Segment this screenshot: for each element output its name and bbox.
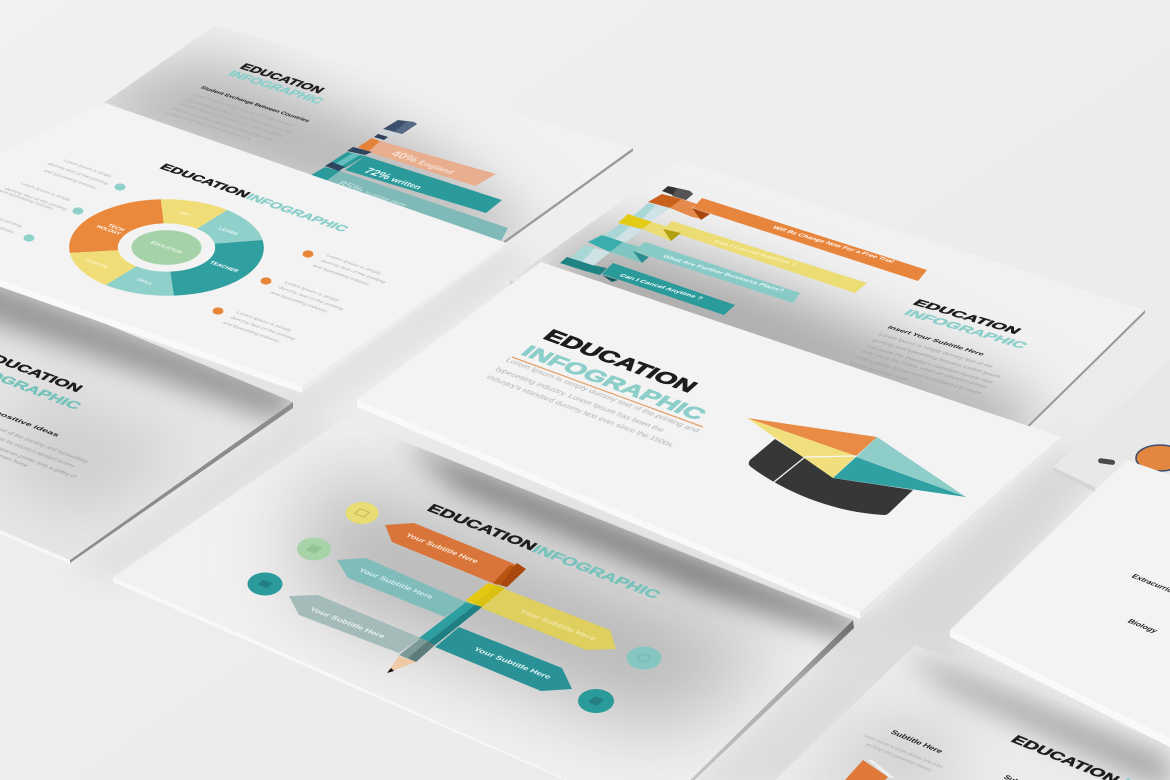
heading: donut slide: EDUCATION xyxy=(157,162,253,199)
body text: when an unknown printer took a galley of type and xyxy=(169,107,274,142)
heading: FAQ slide xyxy=(901,297,1031,350)
legend text: and typesetting industry. xyxy=(220,321,282,344)
arrow: orange: Your Subtitle Here xyxy=(404,531,481,565)
body text: Lorem Ipsum is simply dummy text of the printing xyxy=(190,93,295,128)
icon: orange circle xyxy=(1136,445,1170,471)
legend text: Lorem Ipsum is simply xyxy=(324,254,384,276)
heading: bottom right slide xyxy=(1007,734,1133,780)
legend text: Lorem Ipsum is simply xyxy=(282,281,342,303)
pencil ribbons: Will Be Change Now For a Free Trial xyxy=(770,225,896,264)
body text: and typesetting industry. Lorem Ipsum has been the xyxy=(183,98,293,135)
arrow: gray: Your Subtitle Here xyxy=(308,605,388,640)
heading: bar chart slide: INFOGRAPHIC xyxy=(225,69,327,106)
slide: small right back xyxy=(1053,360,1170,520)
body text: took a galley of type and scrambled it to make xyxy=(853,356,983,396)
heading: main slide xyxy=(516,327,711,424)
arrow: gray xyxy=(289,595,421,653)
heading: donut slide xyxy=(157,162,352,234)
donut labels: LEARN xyxy=(216,227,239,236)
body text: typesetting industry. Lorem Ipsum has been the xyxy=(494,365,667,434)
pencil ribbons: Can I Cancel Anytime ? xyxy=(617,273,705,301)
legend text: dummy text of the printing xyxy=(318,259,388,285)
legend text: and typesetting industry. xyxy=(310,264,372,287)
body text: Lorem Ipsum is simply dummy text of the xyxy=(862,734,945,769)
donut labels: SCHOOL xyxy=(83,259,111,270)
donut labels: HOLOGY xyxy=(94,225,122,236)
slide: donut chart xyxy=(0,103,507,393)
legend text: Lorem Ipsum is simply xyxy=(234,311,294,333)
heading: pencil slide: EDUCATION xyxy=(423,502,540,553)
heading: main slide: INFOGRAPHIC xyxy=(516,343,711,424)
legend text: dummy text of the printing xyxy=(45,162,110,186)
donut labels: EDUCATION xyxy=(148,241,184,255)
body text: has been the industry's standard dummy text xyxy=(864,345,994,385)
legend text xyxy=(0,159,388,344)
ground shadows xyxy=(0,250,1170,780)
heading: FAQ slide: INFOGRAPHIC xyxy=(901,307,1031,350)
arrow: yellow: Your Subtitle Here xyxy=(518,607,599,642)
body text: ever since the 1500s, when an unknown printer xyxy=(859,350,989,390)
body text: scrambled it to make a type specimen book xyxy=(162,111,253,142)
heading: FAQ slide: EDUCATION xyxy=(910,297,1025,336)
icon: dark pill xyxy=(1098,458,1115,465)
donut labels: TEACHER xyxy=(207,261,240,274)
body text: Lorem Ipsum is simply dummy text of the printing and xyxy=(504,356,702,434)
donut labels: ART xyxy=(176,211,192,218)
arrow: yellow xyxy=(466,588,616,650)
arrow: dark teal xyxy=(435,627,572,691)
arrow: orange xyxy=(385,523,517,585)
pencil ribbons: What Are Further Business Plans? xyxy=(660,254,786,293)
slide: main cap xyxy=(357,262,1061,619)
slide: bar chart xyxy=(102,32,633,242)
body text: a type specimen book. xyxy=(847,362,912,383)
arrow: light teal: Your Subtitle Here xyxy=(357,566,436,600)
pencil ribbons: Can I Cancel Anytime ? xyxy=(711,239,799,267)
heading: main slide: EDUCATION xyxy=(538,327,701,396)
legend text: dummy text of the printing xyxy=(228,316,298,342)
slide: right partial xyxy=(950,460,1170,747)
slide: bottom right xyxy=(775,645,1170,780)
legend text: Lorem Ipsum is simply xyxy=(18,182,73,202)
body text xyxy=(162,93,295,142)
legend text: and typesetting industry. xyxy=(41,169,99,190)
legend dots xyxy=(24,183,314,315)
body text: industry's standard dummy text ever since the 1500s, xyxy=(176,102,286,138)
donut labels: SKILL xyxy=(134,278,155,287)
legend text: Lorem Ipsum is simply xyxy=(61,159,114,179)
slide: left partial xyxy=(0,270,300,564)
icon circles xyxy=(248,502,662,713)
body text: industry's standard dummy text ever since the 1500s. xyxy=(485,373,678,449)
icon: graduation cap xyxy=(747,418,966,515)
heading: left slide xyxy=(0,355,84,409)
legend text: dummy text of the printing xyxy=(2,187,69,212)
bar chart with pencil: 72% written xyxy=(361,166,426,191)
heading: pencil slide: INFOGRAPHIC xyxy=(528,543,664,602)
heading: pencil slide xyxy=(423,502,664,602)
bar chart with pencil: 85% Subtitle Here xyxy=(334,179,413,208)
donut labels: TECH xyxy=(105,224,126,232)
donut labels xyxy=(83,211,240,287)
label: biology: Biology xyxy=(1126,618,1161,635)
subtitle: Insert Your Subtitle Here xyxy=(885,325,986,357)
pencil ribbons xyxy=(560,186,927,315)
body text: Lorem Ipsum is simply dummy text of the xyxy=(876,333,994,369)
heading: bottom right slide: EDUCATION xyxy=(1007,734,1122,780)
body text xyxy=(847,333,1002,396)
heading: bar chart slide: EDUCATION xyxy=(237,62,327,95)
legend text: and typesetting industry. xyxy=(268,291,330,314)
heading: donut slide: INFOGRAPHIC xyxy=(243,192,352,234)
arrow: dark teal: Your Subtitle Here xyxy=(472,645,554,680)
subtitle: Subtitle Here xyxy=(889,729,946,755)
arrow: light teal xyxy=(337,558,466,617)
slide: pencil arrows xyxy=(113,418,860,780)
body text: printing and typesetting industry. Lorem Ipsum xyxy=(870,339,1002,379)
divider line xyxy=(512,357,703,427)
donut chart xyxy=(32,181,301,314)
slide: FAQ ribbons xyxy=(510,186,1145,426)
legend text: dummy text of the printing xyxy=(276,286,346,312)
subtitle: Student Exchange Between Countries xyxy=(198,86,311,123)
body text: printing and typesetting industry xyxy=(865,743,934,773)
body text xyxy=(485,356,702,449)
pencil xyxy=(387,563,526,673)
bar chart with pencil: 40% England xyxy=(388,149,459,176)
bar chart with pencil xyxy=(300,120,508,243)
icon: orange book xyxy=(845,760,895,780)
